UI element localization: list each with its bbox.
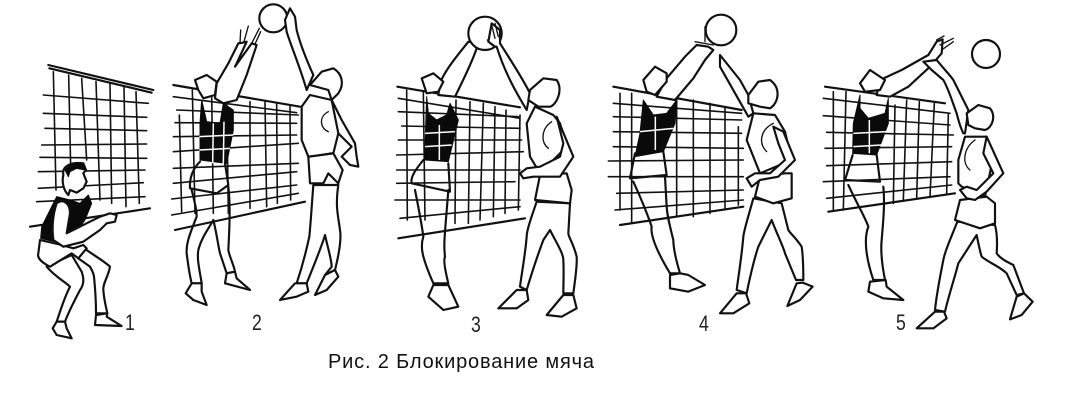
ball: [706, 15, 736, 45]
ball: [972, 40, 1000, 68]
attacker, stage 4: [720, 55, 813, 313]
net 3: [395, 87, 525, 238]
number 4: 4: [699, 312, 709, 337]
stage 2: blocker reaches over net, attacker touches ball: [172, 4, 358, 305]
number 3: 3: [471, 313, 481, 338]
attacker standing: [487, 23, 577, 317]
attacker jumping: [280, 8, 358, 300]
stage 1: player crouching at the net: [30, 65, 153, 338]
caption: Рис. 2 Блокирование мяча: [328, 351, 595, 373]
net 4: [608, 87, 743, 225]
player crouching: [38, 163, 122, 338]
number 2: 2: [252, 311, 262, 336]
blocker, back view: [845, 36, 953, 300]
blocker, back view: [411, 42, 478, 310]
blocker, back view: [630, 27, 713, 292]
net 1: [30, 65, 153, 227]
net 5: [823, 87, 955, 212]
ball: [468, 17, 502, 50]
net 2: [172, 85, 305, 230]
number 5: 5: [896, 311, 906, 336]
stage 3: both players contact the ball above the net: [395, 17, 577, 317]
number 1: 1: [125, 311, 135, 336]
blocker, back view: [186, 26, 261, 305]
stage 5: ball passes above, players drop from the net: [823, 36, 1033, 328]
stage 4: block contact on top of the ball: [608, 15, 743, 292]
attacker landing: [917, 60, 1033, 328]
ball: [259, 4, 287, 32]
